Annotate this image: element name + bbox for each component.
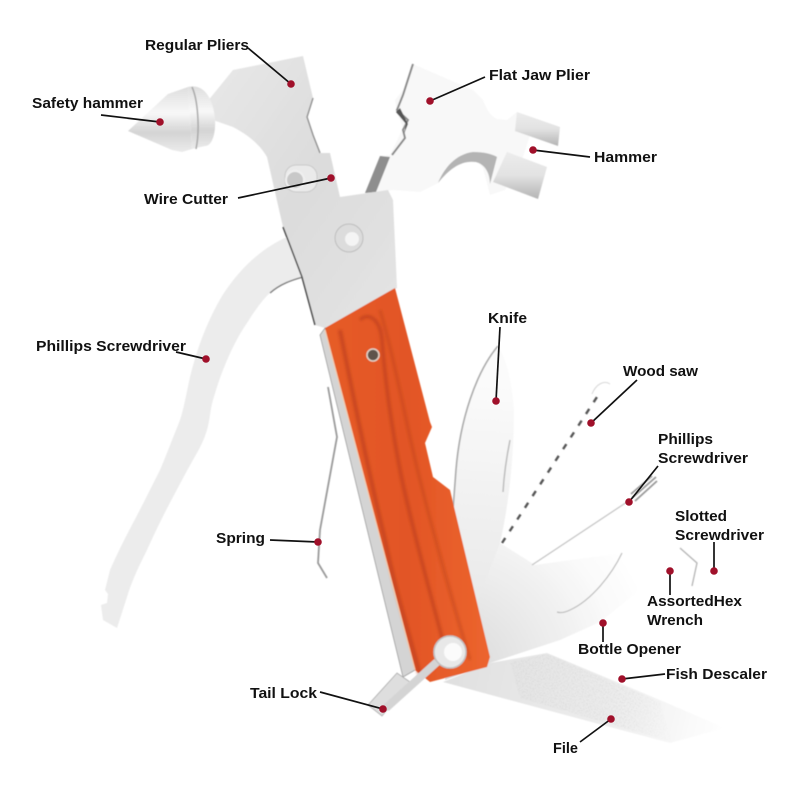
hex wrench and slotted screwdriver outline <box>557 548 697 613</box>
label: Flat Jaw Plier: Flat Jaw Plier <box>489 67 590 84</box>
file and fish descaler blade <box>443 653 725 743</box>
label: AssortedHex Wrench: Wrench <box>647 612 703 629</box>
label: File: File <box>553 740 578 757</box>
label: Phillips Screwdriver right: Screwdriver <box>658 450 748 467</box>
file speckle texture <box>510 654 672 742</box>
label: Fish Descaler <box>618 666 767 683</box>
label: Regular Pliers <box>145 37 295 88</box>
label: Knife <box>488 310 527 405</box>
flat jaw plier and hammer <box>365 64 560 199</box>
label: Safety hammer: Safety hammer <box>32 95 143 112</box>
label: Safety hammer <box>32 95 164 126</box>
tail lock <box>368 636 466 716</box>
knife blade <box>446 346 514 640</box>
handle inner edge shadow <box>270 277 303 293</box>
spring <box>318 387 337 578</box>
label: Phillips Screwdriver right <box>625 431 748 506</box>
regular pliers and safety hammer head <box>128 56 397 328</box>
label: Spring <box>216 530 322 547</box>
label: Wire Cutter: Wire Cutter <box>144 191 228 208</box>
hammer claw <box>438 152 497 184</box>
plier tang <box>365 156 390 193</box>
hammer collar <box>188 86 215 149</box>
label: Spring: Spring <box>216 530 265 547</box>
label: Slotted Screwdriver: Screwdriver <box>675 527 764 544</box>
tool illustration <box>101 56 725 743</box>
label: Tail Lock: Tail Lock <box>250 685 318 702</box>
label: Wood saw <box>587 363 698 427</box>
wooden handle <box>325 288 490 682</box>
label: File <box>553 715 615 757</box>
lower hammer lobe <box>493 152 547 199</box>
label: Bottle Opener: Bottle Opener <box>578 641 681 658</box>
fan of folding blades <box>445 505 680 680</box>
hammer cone <box>128 87 192 152</box>
wire cutter notch and rivet <box>285 165 317 192</box>
label: Wire Cutter <box>144 174 335 208</box>
label: Flat Jaw Plier <box>426 67 590 105</box>
label: Phillips Screwdriver right: Phillips <box>658 431 713 448</box>
plier teeth <box>392 64 413 155</box>
label: AssortedHex Wrench: AssortedHex <box>647 593 743 610</box>
label: Phillips Screwdriver left <box>36 338 210 363</box>
label: Slotted Screwdriver <box>675 508 764 575</box>
label: Knife: Knife <box>488 310 527 327</box>
label: AssortedHex Wrench <box>647 567 743 629</box>
label: Hammer: Hammer <box>594 149 657 166</box>
curved handle: phillips screwdriver <box>101 237 303 628</box>
pivot rivet <box>335 224 363 252</box>
label: Wood saw: Wood saw <box>623 363 698 380</box>
label: Slotted Screwdriver: Slotted <box>675 508 727 525</box>
label: Phillips Screwdriver left: Phillips Screwdriver <box>36 338 186 355</box>
label: Regular Pliers: Regular Pliers <box>145 37 249 54</box>
upper hammer lobe <box>515 112 560 146</box>
label: Bottle Opener <box>578 619 681 658</box>
handle screw <box>367 349 379 361</box>
steel side liner <box>320 328 415 677</box>
label: Tail Lock <box>250 685 387 713</box>
label: Fish Descaler: Fish Descaler <box>666 666 767 683</box>
handle grain <box>340 310 470 675</box>
label: Hammer <box>529 146 657 166</box>
wood saw blade <box>502 382 610 543</box>
wood edge highlight <box>325 330 415 670</box>
phillips screwdriver blade <box>532 476 657 565</box>
